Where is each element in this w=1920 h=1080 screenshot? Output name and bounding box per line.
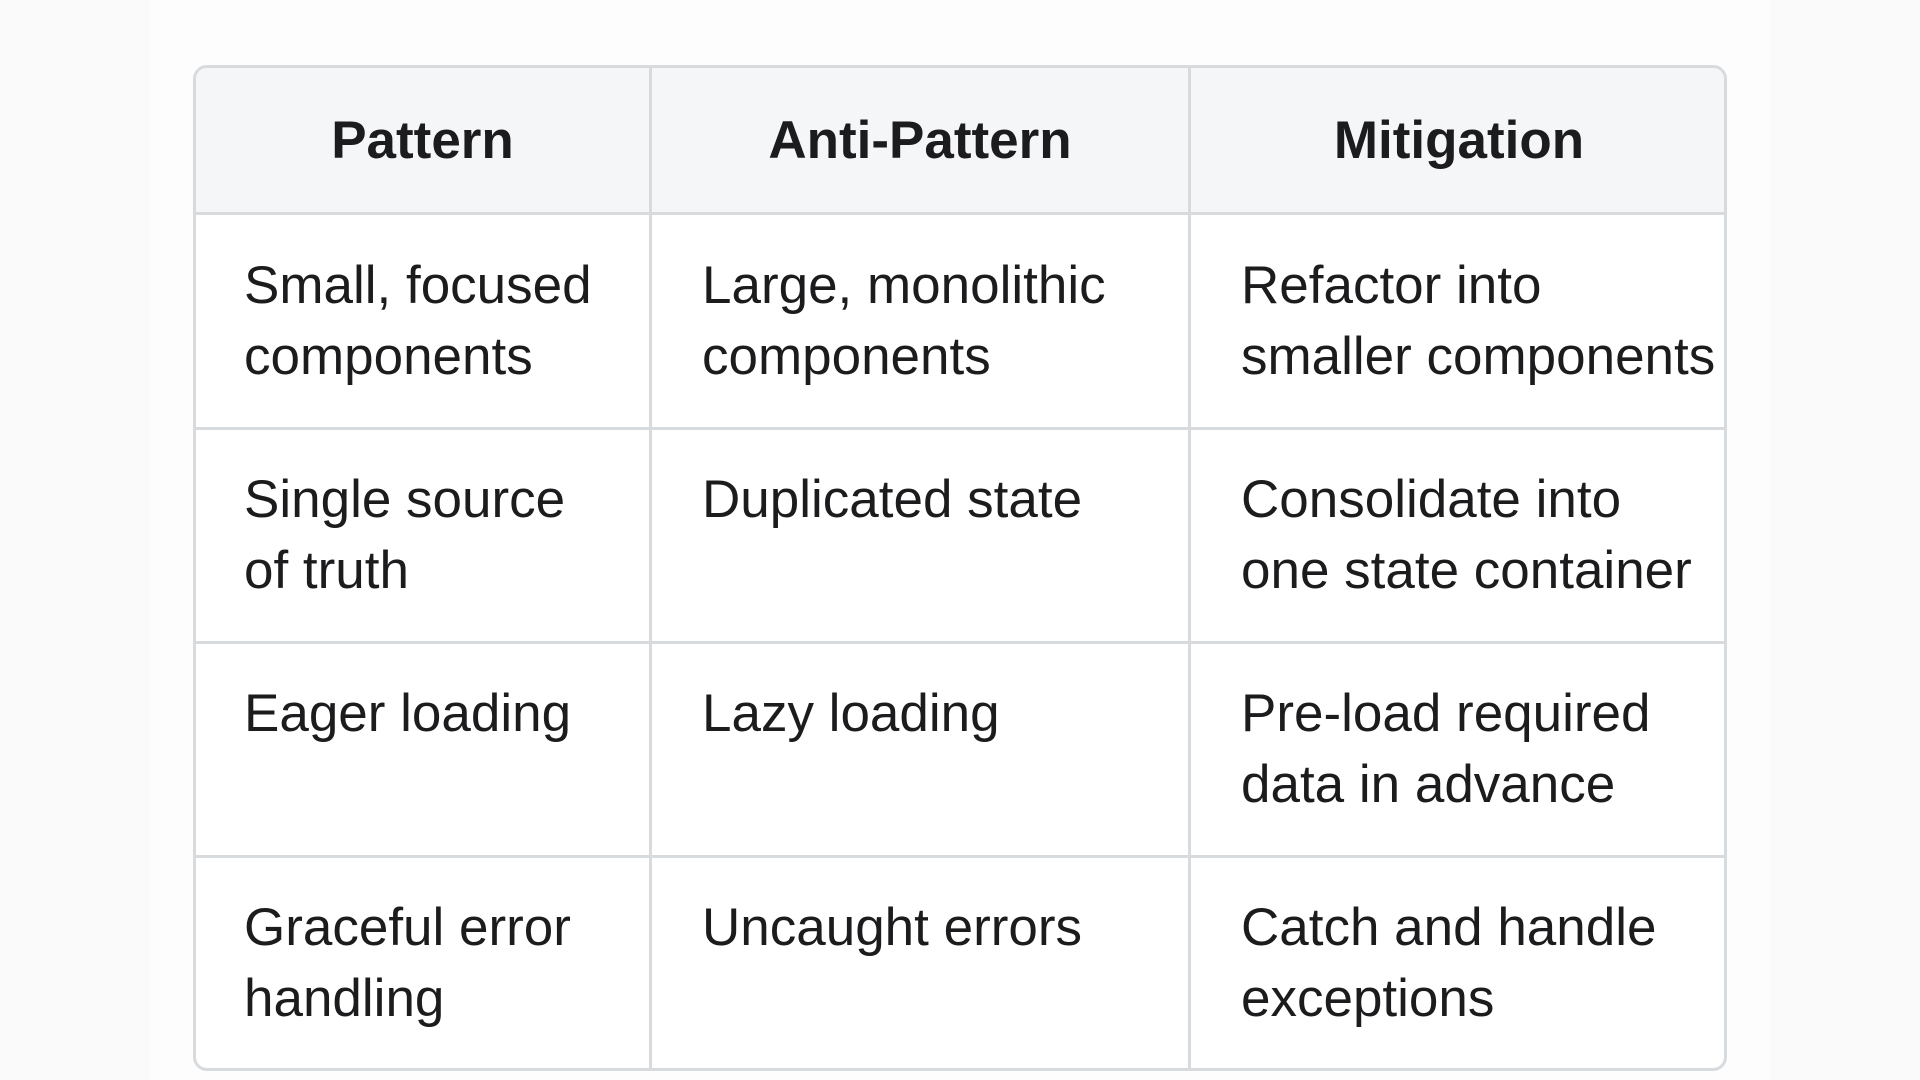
- row 4 mitigation: [1241, 898, 1656, 1028]
- table: [193, 65, 1727, 1071]
- header: Pattern: Pattern: [331, 111, 514, 170]
- row 1 mitigation: Refactor into: [1241, 256, 1541, 315]
- header: Mitigation: Mitigation: [1334, 111, 1584, 170]
- row 4 mitigation: exceptions: [1241, 969, 1494, 1028]
- row 2: of truth: [244, 541, 409, 600]
- row 4 anti-pattern: Uncaught errors: [702, 898, 1082, 957]
- row 3 mitigation: [1241, 684, 1651, 814]
- row 1: components: [244, 327, 533, 386]
- row 2: Single source: [244, 470, 565, 529]
- row 1 anti-pattern: [702, 256, 1106, 386]
- row 2 mitigation: Consolidate into: [1241, 470, 1621, 529]
- row 4: [244, 898, 571, 1028]
- row 4 mitigation: Catch and handle: [1241, 898, 1656, 957]
- row 1 mitigation: [1241, 256, 1715, 386]
- row 1 mitigation: smaller components: [1241, 327, 1715, 386]
- row 2: [244, 470, 565, 600]
- row 2 mitigation: one state container: [1241, 541, 1692, 600]
- row 3: Eager loading: [244, 684, 571, 743]
- header: Anti-Pattern: Anti-Pattern: [768, 111, 1072, 170]
- row 4: Graceful error: [244, 898, 571, 957]
- row 1: [244, 256, 592, 386]
- row 4: handling: [244, 969, 444, 1028]
- header row: [196, 68, 1724, 214]
- row 2 mitigation: [1241, 470, 1692, 600]
- row 3 anti-pattern: Lazy loading: [702, 684, 1000, 743]
- row 1 anti-pattern: Large, monolithic: [702, 256, 1106, 315]
- row 1: Small, focused: [244, 256, 592, 315]
- row 3 mitigation: data in advance: [1241, 755, 1615, 814]
- row 3 mitigation: Pre-load required: [1241, 684, 1651, 743]
- row 1 anti-pattern: components: [702, 327, 991, 386]
- row 2 anti-pattern: Duplicated state: [702, 470, 1082, 529]
